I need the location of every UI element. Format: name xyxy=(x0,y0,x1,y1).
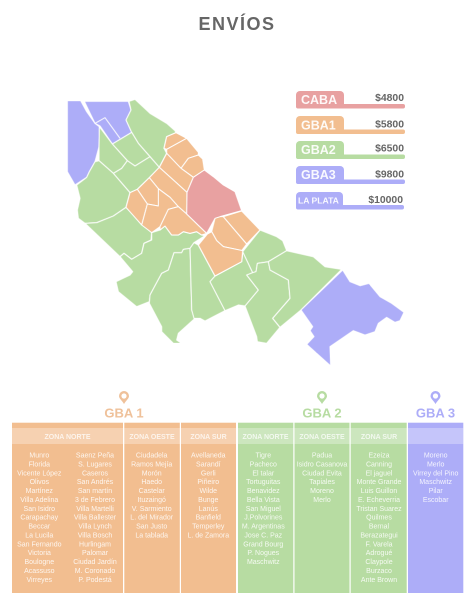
list: zona norte column 1: Martínez xyxy=(26,488,53,495)
legend row: GBA1: $5800 xyxy=(375,120,404,130)
heading: GBA 1: GBA 1 xyxy=(104,405,144,420)
list: zona norte column 2: 3 de Febrero xyxy=(75,497,115,504)
list: zona oeste: Moreno xyxy=(310,488,334,495)
legend row: GBA3 xyxy=(296,166,405,184)
zone: GBA3 north-west xyxy=(67,101,132,185)
list: zona oeste: L. del Mirador xyxy=(130,515,174,522)
list: zona norte column 2: San Andrés xyxy=(77,479,114,486)
list: zona sur: Ezeiza xyxy=(368,452,390,460)
list: zona oeste: Tapiales xyxy=(309,479,335,486)
list: zona norte column 2: Hurlingam xyxy=(79,541,111,548)
list: GBA 3 localities: Virrey del Pino xyxy=(413,470,458,477)
list: zona norte column 2: Villa Lynch xyxy=(78,524,112,531)
list: zona oeste: Ituzaingó xyxy=(137,497,166,504)
list: zona sur: E. Echeverria xyxy=(358,497,400,504)
list: zona sur: F. Varela xyxy=(365,541,393,548)
list: zona oeste: Castelar xyxy=(139,488,165,495)
heading: GBA 2: GBA 2 xyxy=(302,405,342,420)
list: zona norte column 1: Victoria xyxy=(28,550,51,557)
header: zona norte: ZONA NORTE xyxy=(44,434,91,441)
list: zona sur: Claypole xyxy=(365,559,393,566)
list: zona norte column 2: Villa Ballester xyxy=(74,515,117,522)
table panel: GBA 2 xyxy=(238,423,407,593)
legend row: GBA1 xyxy=(296,116,405,134)
legend row: GBA3: $9800 xyxy=(375,170,404,181)
list: zona norte column 1: Vicente López xyxy=(17,470,62,477)
list: zona sur: Sarandí xyxy=(196,461,221,468)
list: zona norte column 2: M. Coronado xyxy=(75,568,115,575)
legend row: CABA: CABA xyxy=(301,93,337,107)
list: zona sur: Bunge xyxy=(198,497,219,504)
list: zona norte: P. Nogues xyxy=(247,550,280,557)
list: zona oeste: Padua xyxy=(312,452,332,460)
list: zona norte: Tortuguitas xyxy=(246,479,281,486)
list: zona norte column 1: Virreyes xyxy=(27,577,53,584)
legend row: GBA2 xyxy=(296,141,405,159)
list: zona norte: M. Argentinas xyxy=(242,524,285,531)
zone: GBA2 south-west xyxy=(116,226,205,343)
list: zona oeste: Haedo xyxy=(141,479,162,486)
list: zona sur: Ante Brown xyxy=(361,577,397,584)
list: zona norte column 1: Boulogne xyxy=(25,559,54,566)
list: GBA 3 localities: Escobar xyxy=(423,497,449,504)
legend row: CABA xyxy=(296,91,405,108)
heading: GBA 3: GBA 3 xyxy=(416,405,455,420)
list: zona sur: El jaguel xyxy=(366,470,393,477)
list: zona norte column 1: Beccar xyxy=(28,524,51,531)
list: zona norte column 1: Carapachay xyxy=(20,515,59,522)
list: zona sur: Tristan Suarez xyxy=(356,506,402,513)
map of delivery zones xyxy=(67,99,404,366)
header: zona oeste: ZONA OESTE xyxy=(299,434,345,441)
list: zona norte: J.Polvorines xyxy=(244,515,283,522)
list: zona oeste: V. Sarmiento xyxy=(132,506,172,513)
list: zona oeste: Ciudad Evita xyxy=(302,470,342,477)
list: zona norte column 1: Munro xyxy=(29,452,49,460)
list: zona norte column 2: Villa Martelli xyxy=(76,506,114,513)
legend row: GBA1: GBA1 xyxy=(301,118,336,132)
list: GBA 3 localities: Moreno xyxy=(424,452,448,460)
list: zona oeste: Isidro Casanova xyxy=(297,461,347,468)
legend: prices xyxy=(296,91,405,210)
icon: GBA 3 pin xyxy=(430,391,440,404)
list: zona norte column 2: Ciudad Jardín xyxy=(73,559,117,566)
legend row: GBA2: GBA2 xyxy=(301,143,336,157)
list: zona sur: Gerli xyxy=(201,470,216,477)
list: zona norte column 2: San martín xyxy=(78,488,112,495)
list: zona sur: Bernal xyxy=(369,524,390,531)
list: zona norte column 2: Caseros xyxy=(82,470,109,477)
zone: GBA2 north and west xyxy=(77,99,176,259)
zone: GBA2 south-east xyxy=(190,230,342,343)
list: zona norte: Jose C. Paz xyxy=(244,532,283,539)
list: zona norte column 1: La Lucila xyxy=(25,532,53,539)
table panel: GBA 3 xyxy=(408,423,463,593)
list: zona norte column 1: Florida xyxy=(29,461,50,468)
list: zona sur: Canning xyxy=(366,461,392,468)
list: GBA 3 localities: Pilar xyxy=(429,488,443,495)
list: zona sur: Quilmes xyxy=(366,515,392,522)
list: zona norte column 2: Villa Bosch xyxy=(78,532,112,539)
list: zona norte column 1: Villa Adelina xyxy=(20,497,58,504)
legend row: GBA2: $6500 xyxy=(375,144,404,155)
table panel: GBA 1 xyxy=(12,423,236,593)
legend row: La Plata xyxy=(296,192,404,210)
list: zona sur: Burzaco xyxy=(366,568,392,575)
icon: GBA 1 pin xyxy=(119,391,129,404)
zone: GBA1 xyxy=(126,133,260,276)
list: zona sur: Berazategui xyxy=(360,532,398,539)
list: zona norte column 2: P. Podestá xyxy=(78,577,112,584)
list: zona oeste: Ramos Mejía xyxy=(131,461,172,468)
list: GBA 3 localities: Merlo xyxy=(427,461,445,468)
list: zona norte: Grand Bourg xyxy=(243,541,283,548)
list: zona sur: Lanús xyxy=(199,506,218,513)
list: zona norte column 1: Acassuso xyxy=(24,568,55,575)
list: zona norte: San Miguel xyxy=(246,506,281,513)
legend row: La Plata: $10000 xyxy=(368,195,403,206)
list: zona sur: Banfield xyxy=(196,515,221,522)
list: zona sur: Wilde xyxy=(200,488,217,495)
list: zona norte: Pacheco xyxy=(250,461,277,468)
list: zona norte: Tigre xyxy=(255,452,271,460)
title: ENVÍOS xyxy=(198,13,276,34)
list: zona sur: Piñeiro xyxy=(197,479,219,486)
zone: La Plata xyxy=(301,270,404,366)
legend row: CABA: $4800 xyxy=(375,93,404,104)
header: zona norte: ZONA NORTE xyxy=(242,434,289,441)
list: zona sur: L. de Zamora xyxy=(187,532,229,539)
list: zona sur: Temperley xyxy=(192,524,225,531)
legend row: La Plata: LA PLATA xyxy=(298,195,339,205)
list: zona norte: El talar xyxy=(252,470,275,477)
header: zona sur: ZONA SUR xyxy=(190,434,227,441)
list: zona norte: Bella Vista xyxy=(247,497,280,504)
header: zona oeste: ZONA OESTE xyxy=(129,434,175,441)
list: zona sur: Luis Guillon xyxy=(361,488,397,495)
list: zona oeste: San Justo xyxy=(136,524,167,531)
list: zona sur: Monte Grande xyxy=(357,479,401,486)
list: zona norte column 1: San Fernando xyxy=(17,541,62,548)
list: zona norte column 2: Saenz Peña xyxy=(76,452,114,460)
zone: CABA xyxy=(187,170,242,233)
list: zona norte: Benavidez xyxy=(247,488,280,495)
list: zona norte column 2: S. Lugares xyxy=(78,461,112,468)
list: GBA 3 localities: Maschwitz xyxy=(419,479,453,486)
icon: GBA 2 pin xyxy=(317,391,327,404)
list: zona oeste: Morón xyxy=(142,470,162,477)
list: zona norte column 2: Palomar xyxy=(82,550,109,557)
list: zona norte: Maschwitz xyxy=(247,559,280,566)
list: zona sur: Avellaneda xyxy=(191,452,226,460)
header: zona sur: ZONA SUR xyxy=(361,434,397,441)
list: zona sur: Adrogué xyxy=(366,550,392,557)
legend row: GBA3: GBA3 xyxy=(301,168,336,182)
list: zona oeste: Merlo xyxy=(313,497,331,504)
list: zona oeste: Ciudadela xyxy=(136,452,168,460)
list: zona norte column 1: Olivos xyxy=(30,479,50,486)
list: zona oeste: La tablada xyxy=(135,532,168,539)
list: zona norte column 1: San Isidro xyxy=(24,506,55,513)
